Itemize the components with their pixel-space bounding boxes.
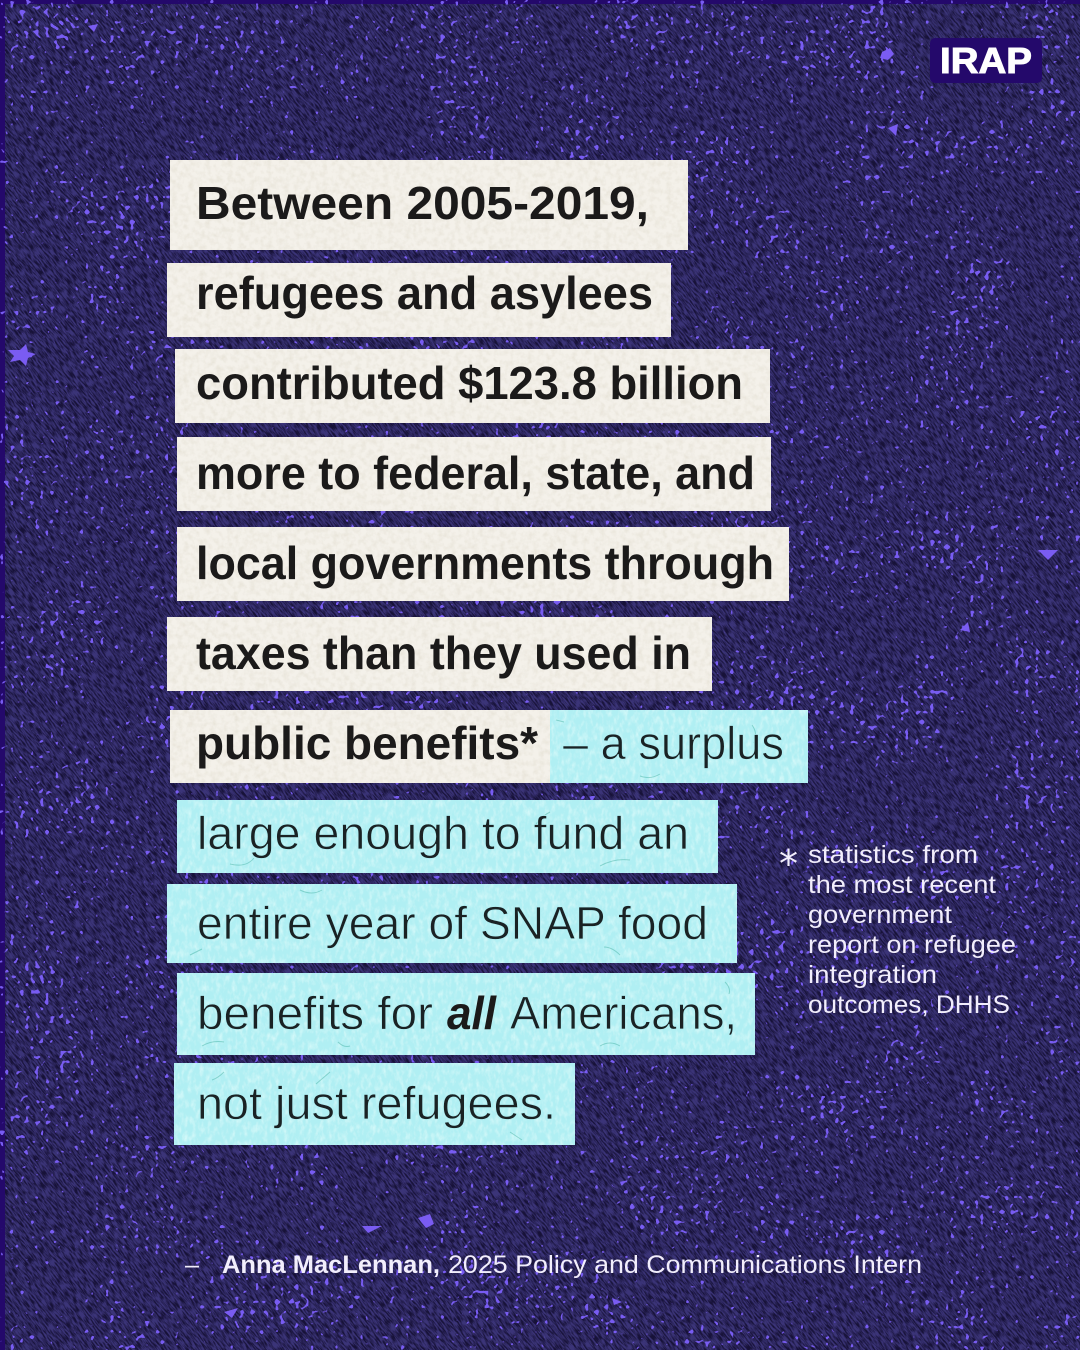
logo: IRAP: IRAP	[940, 40, 1032, 81]
strip: public benefits* – a surplus	[170, 710, 808, 783]
footnote: statistics source: government	[808, 901, 952, 929]
attribution	[185, 1251, 922, 1279]
strip: large enough to fund an: large enough to fund an	[197, 807, 689, 859]
strip: contributed $123.8 billion: contributed $123.8 billion	[196, 357, 743, 409]
strip: public benefits* – a surplus: public benefits*	[196, 717, 538, 769]
footnote: statistics source	[779, 841, 1016, 1019]
strip: entire year of SNAP food: entire year of SNAP food	[197, 897, 708, 949]
strip: large enough to fund an	[177, 800, 718, 873]
strip: more to federal, state, and	[177, 437, 771, 511]
strip: taxes than they used in: taxes than they used in	[196, 627, 691, 679]
strip: not just refugees.	[174, 1063, 575, 1145]
logo: IRAP	[930, 38, 1042, 83]
strip: Between 2005-2019,	[170, 160, 688, 250]
strip: local governments through: local governments through	[196, 537, 774, 589]
strip: Between 2005-2019,: Between 2005-2019,	[196, 177, 649, 229]
strip: refugees and asylees: refugees and asylees	[196, 267, 653, 319]
strip: more to federal, state, and: more to federal, state, and	[196, 447, 755, 499]
footnote: statistics source: report on refugee	[808, 931, 1016, 959]
strip: not just refugees.: not just refugees.	[197, 1077, 556, 1129]
strip: local governments through	[177, 527, 789, 601]
strip: taxes than they used in	[167, 617, 712, 691]
strip: benefits for all Americans,: benefits for	[197, 987, 433, 1039]
strip: benefits for all Americans,: Americans,	[510, 987, 737, 1039]
strip: benefits for all Americans,: all	[447, 987, 497, 1039]
footnote: statistics source: statistics from	[808, 841, 978, 869]
attribution: –	[185, 1251, 199, 1279]
strip: benefits for all Americans,	[177, 973, 755, 1055]
attribution: 2025 Policy and Communications Intern	[448, 1251, 922, 1279]
strip: public benefits* – a surplus: – a surplus	[563, 717, 784, 769]
strip: entire year of SNAP food	[167, 884, 737, 963]
footnote: statistics source: outcomes, DHHS	[808, 991, 1010, 1019]
footnote: statistics source: the most recent	[808, 871, 996, 899]
attribution: Anna MacLennan,	[222, 1251, 440, 1279]
main statement: paper strips	[167, 160, 808, 1145]
footnote: statistics source: integration	[808, 961, 937, 989]
strip: contributed $123.8 billion	[175, 349, 770, 423]
strip: refugees and asylees	[167, 263, 671, 337]
icon: asterisk: *	[779, 842, 798, 886]
